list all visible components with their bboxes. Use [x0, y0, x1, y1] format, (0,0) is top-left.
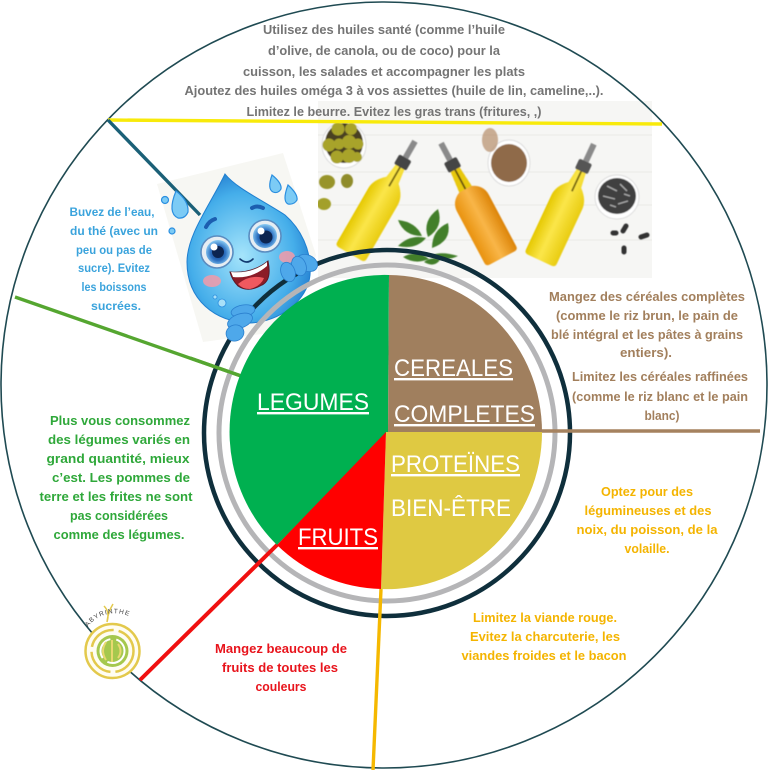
- text: proteines: [462, 485, 719, 663]
- text: proteines: noix, du poisson, de la: [576, 523, 719, 537]
- fruits section line: [140, 544, 278, 680]
- mascot paper background: [157, 153, 316, 342]
- text: cereales: (comme le riz blanc et le pain: [572, 390, 748, 404]
- text: legumes: pas considérées: [70, 509, 168, 523]
- text: eau: sucre). Evitez: [78, 261, 150, 275]
- proteins section line: [373, 589, 381, 770]
- text: eau: Buvez de l’eau,: [70, 205, 154, 219]
- label: cereales: CEREALES: [394, 355, 513, 382]
- smile line: [240, 259, 253, 262]
- text: eau: les boissons: [82, 280, 147, 294]
- text: huiles: cuisson, les salades et accompagner les plats: [243, 65, 525, 79]
- bubbles: [213, 295, 226, 307]
- water droplets: [162, 175, 297, 234]
- label: bien-etre: BIEN-ÊTRE: [391, 495, 511, 522]
- text: huiles: Utilisez des huiles santé (comme l’huile: [263, 23, 505, 37]
- text: proteines: viandes froides et le bacon: [462, 649, 626, 663]
- slice: fruits: [277, 432, 386, 589]
- text: legumes: terre et les frites ne sont: [40, 490, 193, 504]
- logo sprout: [104, 604, 113, 622]
- cheeks: [203, 251, 295, 287]
- text: eau: sucrées.: [91, 299, 141, 313]
- text: huiles: [184, 23, 604, 119]
- bottle 3: [524, 142, 597, 267]
- text: cereales: [549, 290, 748, 423]
- text: cereales: entiers).: [620, 346, 672, 360]
- flax seed bowl: [482, 128, 530, 186]
- text: cereales: (comme le riz brun, le pain de: [556, 309, 738, 323]
- text: cereales: blanc): [644, 409, 680, 423]
- pie chart: healthy plate: [230, 275, 542, 589]
- text: legumes: comme des légumes.: [54, 528, 184, 542]
- plate outer ring: [204, 250, 570, 616]
- yellow divider line: [108, 120, 662, 124]
- text: cereales: Limitez les céréales raffinées: [572, 370, 748, 384]
- text: proteines: légumineuses et des: [584, 504, 712, 518]
- bottle 2: [438, 142, 518, 266]
- photo: oils and seeds: [317, 101, 652, 278]
- water section line: [108, 120, 200, 215]
- slice: legumes: [230, 275, 389, 545]
- green line over rings: [190, 358, 244, 377]
- text: huiles: d’olive, de canola, ou de coco) pour la: [268, 44, 501, 58]
- vegetables section line: [15, 297, 244, 377]
- text: fruits: couleurs: [256, 680, 307, 694]
- label: proteines: PROTEÏNES: [391, 451, 520, 478]
- mouth: [230, 261, 269, 289]
- text: legumes: [40, 414, 193, 542]
- eyebrows: [206, 206, 263, 227]
- text: eau: [70, 205, 158, 313]
- slice: cereales: [388, 275, 542, 432]
- label: completes: COMPLETES: [394, 401, 535, 428]
- text: proteines: Evitez la charcuterie, les: [470, 630, 620, 644]
- logo text: ABYRINTHE: [86, 608, 130, 627]
- drop shape: [187, 174, 310, 323]
- water drop body: [162, 174, 310, 323]
- text: fruits: fruits de toutes les: [222, 661, 338, 675]
- mascot lower hand: [224, 303, 256, 344]
- text: cereales: blé intégral et les pâtes à grains: [551, 328, 743, 342]
- text: legumes: c’est. Les pommes de: [52, 471, 190, 485]
- text: fruits: Mangez beaucoup de: [215, 642, 347, 656]
- slice: proteines: [381, 432, 542, 589]
- text: huiles: Limitez le beurre. Evitez les gras trans (fritures, ,): [246, 105, 542, 119]
- right eye: [249, 220, 281, 252]
- left eye: [201, 236, 233, 268]
- text: proteines: Limitez la viande rouge.: [473, 611, 617, 625]
- logo rings: [86, 624, 140, 678]
- text: legumes: des légumes variés en: [48, 433, 190, 447]
- text: fruits: [215, 642, 347, 694]
- olive bowl: [317, 122, 366, 210]
- text: eau: peu ou pas de: [76, 243, 152, 257]
- mascot upper hand: [278, 251, 320, 284]
- text: legumes: Plus vous consommez: [50, 414, 190, 428]
- sunflower seed bowl: [595, 175, 647, 252]
- text: legumes: grand quantité, mieux: [46, 452, 190, 466]
- cereals section line: [540, 429, 760, 433]
- logo: labyrinthe: [84, 604, 141, 680]
- bottle 1: [336, 140, 418, 262]
- text: proteines: volaille.: [624, 542, 670, 556]
- teeth: [231, 262, 267, 277]
- label: fruits: FRUITS: [298, 524, 378, 551]
- tongue: [238, 277, 264, 289]
- label: legumes: LEGUMES: [257, 389, 369, 416]
- text: cereales: Mangez des céréales complètes: [549, 290, 745, 304]
- basil leaves: [398, 209, 458, 265]
- text: huiles: Ajoutez des huiles oméga 3 à vos assiettes (huile de lin, cameline,..).: [184, 84, 604, 98]
- plate inner ring: [219, 265, 555, 601]
- text: proteines: Optez pour des: [601, 485, 693, 499]
- text: eau: du thé (avec un: [70, 224, 158, 238]
